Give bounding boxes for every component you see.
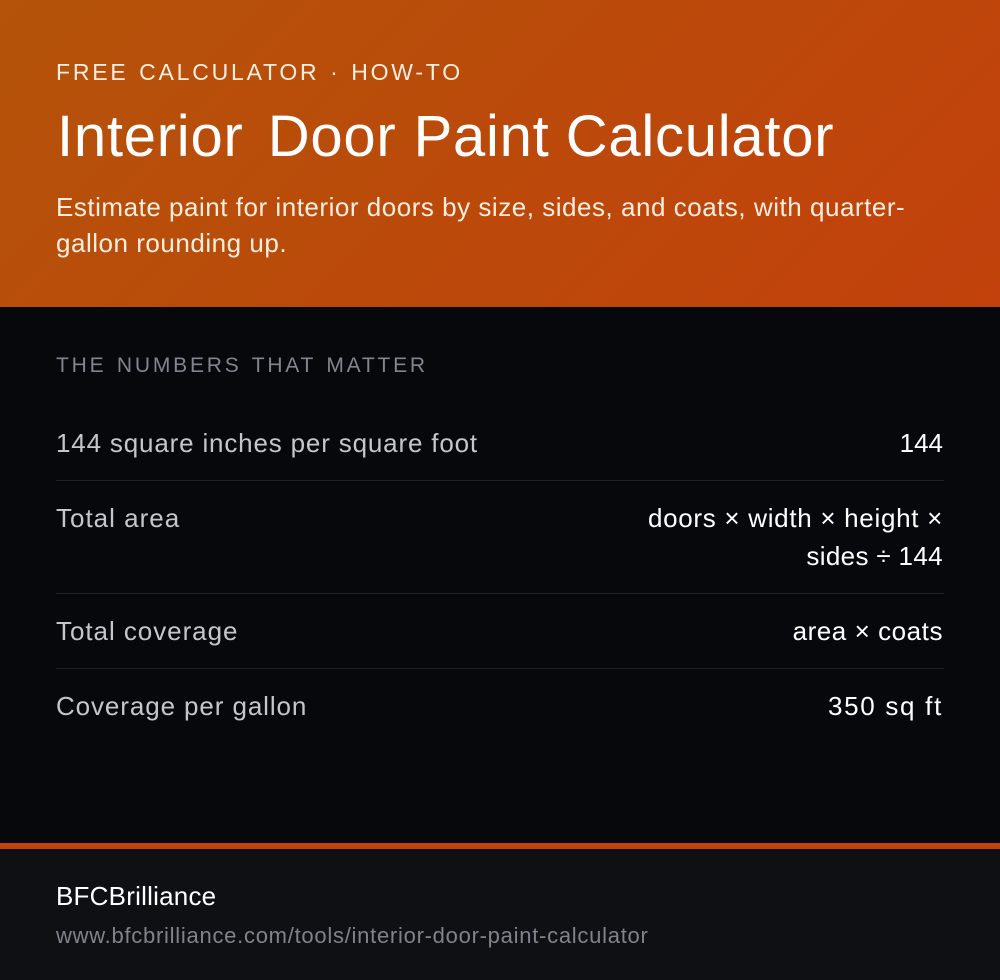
row: coverage per gallon xyxy=(56,691,943,721)
row label: 144 square inches per square foot xyxy=(56,428,478,458)
row label: Total area xyxy=(56,503,180,533)
row value: sides ÷ 144 xyxy=(806,541,943,571)
row: square inches xyxy=(56,428,943,458)
url: www.bfcbrilliance.com/tools/interior-door-paint-calculator xyxy=(56,923,649,948)
row label: Coverage per gallon xyxy=(56,691,307,721)
row value: area × coats xyxy=(793,616,943,646)
subtitle: Estimate paint for interior doors by size, sides, and coats, with quarter- xyxy=(56,192,905,222)
row value: 350 sq ft xyxy=(828,691,943,721)
section heading: THE NUMBERS THAT MATTER xyxy=(56,354,428,377)
footer panel xyxy=(0,843,1000,980)
row value: 144 xyxy=(900,428,943,458)
panel: numbers that matter xyxy=(0,307,1000,843)
row: total area xyxy=(56,503,943,571)
brand name: BFCBrilliance xyxy=(56,881,216,911)
row label: Total coverage xyxy=(56,616,238,646)
title: Interior Door Paint Calculator xyxy=(57,104,834,169)
subtitle xyxy=(56,192,905,258)
header panel xyxy=(0,0,1000,307)
row: total coverage xyxy=(56,616,943,646)
eyebrow label: FREE CALCULATOR · HOW-TO xyxy=(56,59,463,85)
row value: doors × width × height × xyxy=(648,503,943,533)
subtitle: gallon rounding up. xyxy=(56,228,287,258)
row value xyxy=(648,503,943,571)
